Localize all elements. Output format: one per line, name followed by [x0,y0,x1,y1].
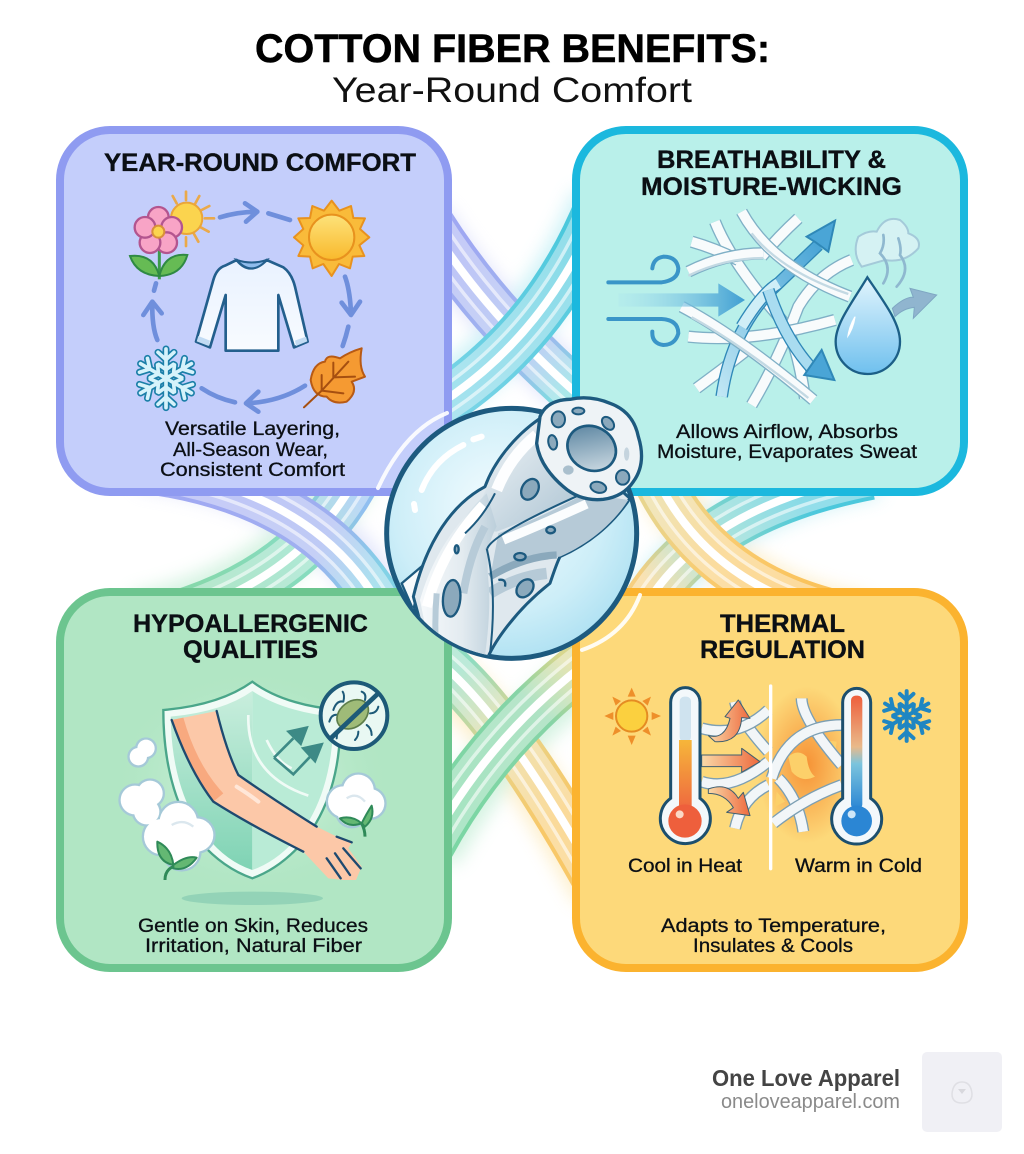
season cycle illustration [130,192,369,412]
warm glow [757,687,857,843]
heading: YEAR-ROUND COMFORT [104,149,416,177]
teal ribbon right [635,475,870,625]
connector ribbons between panels [136,199,876,893]
description: All-Season Wear, [173,440,328,461]
temperature illustration [604,684,932,870]
icon: flower [130,207,187,279]
icon: shirt [196,260,308,351]
description: Insulates & Cools [693,936,853,957]
panel background [576,130,964,492]
arrow: vapor [892,288,937,318]
icon: cotton left small [129,739,155,766]
arrow: airflow [618,283,745,317]
strand outlines [464,492,578,652]
heading: MOISTURE-WICKING [641,173,902,201]
heading: QUALITIES [183,636,318,664]
logo tile [922,1052,1002,1132]
title line 2: Year-Round Comfort [332,71,692,110]
fiber strands [702,698,842,832]
description: Irritation, Natural Fiber [145,936,363,957]
description [160,419,346,481]
brand url: oneloveapparel.com [721,1091,900,1113]
teal ribbon top [430,205,600,410]
skin protection illustration [112,668,392,905]
arrows [702,700,760,816]
lower right strand [490,493,628,578]
icon: snowflake [882,691,932,741]
violet ribbon left [140,468,385,615]
brand footer [712,1052,1002,1132]
brand name: One Love Apparel [712,1065,900,1091]
description: Allows Airflow, Absorbs [676,422,898,443]
icon: autumn leaf [304,348,365,407]
airflow illustration [608,212,937,405]
icon: thermometer cold [832,688,882,844]
icon: shield [163,682,340,878]
panel: breathability and moisture-wicking [576,130,964,492]
blue fibers [722,245,818,397]
heading: HYPOALLERGENIC [133,610,368,638]
icon: no allergen mite [321,682,387,749]
title line 1: COTTON FIBER BENEFITS: [255,27,770,71]
icon: wind lines [608,257,678,345]
heading [700,610,865,664]
icon: water drop [836,277,900,374]
back wedge [402,565,423,610]
heading: THERMAL [720,610,845,638]
left strand [420,493,497,667]
heading: BREATHABILITY & [657,146,886,174]
panel: hypoallergenic qualities [60,592,448,968]
warm pockets [775,740,837,807]
title [255,27,770,110]
arrows on shield [274,728,322,774]
description [138,916,368,957]
panel background [576,592,964,968]
icon: steam cloud [856,219,919,287]
soft glow [112,668,392,895]
description: Versatile Layering, [165,419,340,440]
label: cool in heat: Cool in Heat [628,856,743,877]
panel background [60,592,448,968]
description: Moisture, Evaporates Sweat [657,442,918,463]
divider [769,684,772,870]
panel: thermal regulation [576,592,964,968]
ribbon glow [136,199,876,893]
label: warm in cold: Warm in Cold [795,856,922,877]
description: Adapts to Temperature, [661,916,886,937]
silhouette [413,418,630,670]
icon: thermometer hot [660,688,710,844]
icon: arm [172,711,362,880]
icon: summer sun [294,201,369,276]
description: Gentle on Skin, Reduces [138,916,368,937]
description [657,422,918,463]
heading: REGULATION [700,636,865,664]
heading [641,146,902,201]
fiber strands [688,218,852,405]
icon: spring sun [171,192,214,246]
upper strand [487,422,574,532]
central fiber medallion [387,398,642,670]
arrow head down [804,350,834,380]
fiber body [402,418,630,670]
gold ribbon right [645,450,860,620]
green ribbon left [140,470,360,625]
top-over strands [682,212,850,400]
shadow [182,892,323,905]
arrow head up [807,221,835,252]
violet ribbon top [430,225,590,405]
glass circle [387,408,637,658]
icon: cotton leaves [157,806,372,880]
fiber pores [441,476,555,617]
halo arcs around centre [378,413,640,650]
panel: year-round comfort [60,130,448,492]
description [661,916,886,957]
fiber cross section [537,398,642,500]
glass highlights [414,437,482,510]
icon: sun [604,688,661,745]
gold ribbon bottom [430,655,600,885]
description: Consistent Comfort [160,460,346,481]
icon: snowflake [137,349,195,408]
panel background [60,130,448,492]
cycle arrows [143,203,360,412]
heading [133,610,368,664]
green ribbon bottom [430,660,590,845]
icon: cotton bolls [120,774,385,870]
